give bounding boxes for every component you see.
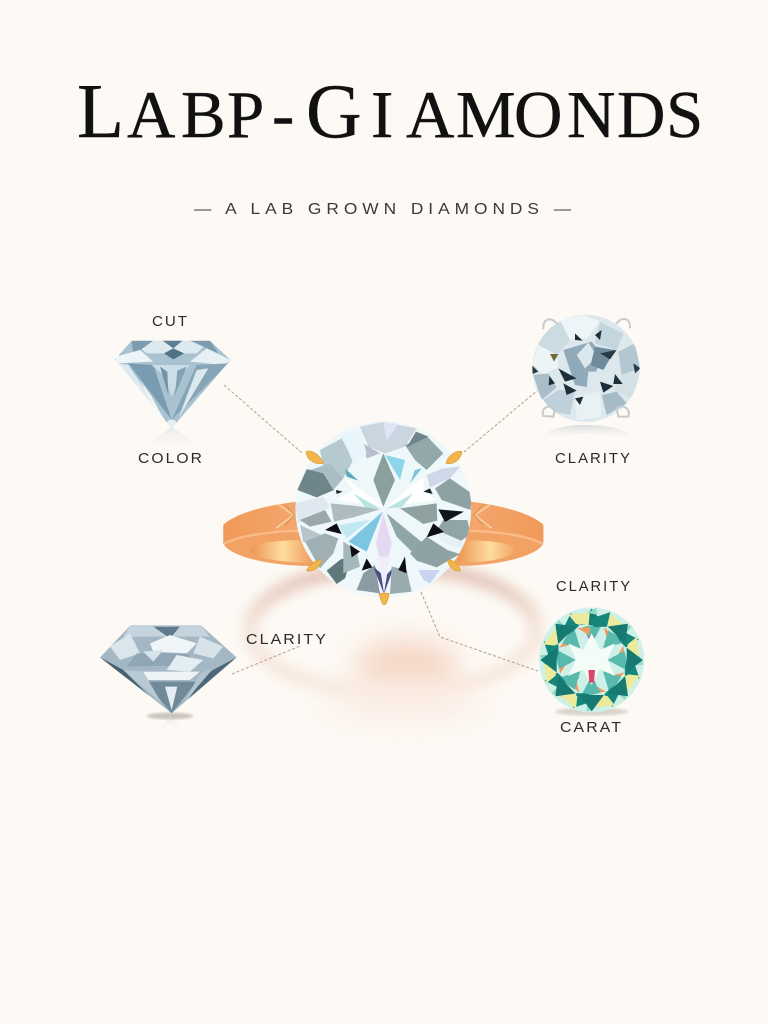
label: CARAT: CARAT	[560, 719, 623, 736]
icon: colorful round diamond	[539, 608, 644, 716]
ring shadow	[250, 567, 536, 722]
label: CLARITY lower left: CLARITY	[246, 631, 328, 648]
ring band	[223, 502, 543, 566]
icon: brilliant side-view diamond	[100, 625, 237, 732]
main round diamond	[295, 421, 472, 597]
label: CLARITY lower right: CLARITY	[556, 578, 632, 595]
label: CLARITY upper right: CLARITY	[555, 450, 632, 467]
icon: cut diamond	[115, 340, 230, 436]
label: CUT: CUT	[152, 313, 189, 330]
subtitle: — A LAB GROWN DIAMONDS —	[194, 201, 576, 218]
title: LABP-GIAMONDS	[77, 68, 703, 154]
silver prongs	[543, 319, 630, 417]
ring illustration	[223, 421, 543, 605]
connector: clarity lower left	[232, 646, 300, 674]
infographic canvas	[79, 86, 700, 732]
connector: carat to ring	[421, 592, 538, 671]
label: COLOR: COLOR	[138, 450, 204, 467]
connector: clarity top right to ring	[464, 390, 538, 452]
connector: cut to ring	[224, 385, 302, 453]
icon: round diamond with silver prongs	[532, 315, 641, 440]
prongs	[306, 451, 462, 605]
